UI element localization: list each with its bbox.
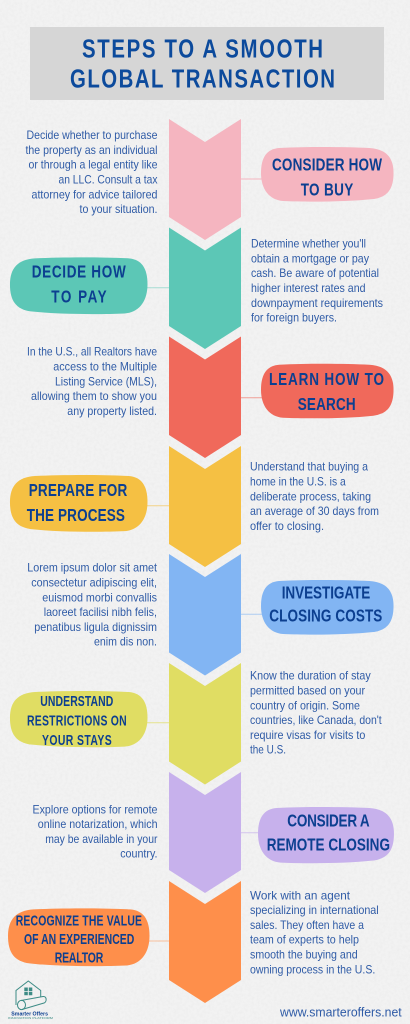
label blob: step 8: OF AN EXPERIENCED bbox=[24, 931, 134, 947]
label blob: step 1: TO BUY bbox=[301, 181, 354, 200]
description: step 7: online notarization, which bbox=[38, 818, 157, 831]
description: step 1: attorney for advice tailored bbox=[32, 188, 158, 201]
description: step 8: sales. They often have a bbox=[250, 919, 364, 932]
step 5: investigate closing costs bbox=[27, 554, 394, 676]
description: step 6 bbox=[250, 670, 382, 757]
website url: www.smarteroffers.net bbox=[279, 1006, 402, 1020]
description: step 4 bbox=[250, 461, 379, 533]
description: step 2 bbox=[251, 238, 383, 325]
connector: step 6 bbox=[147, 722, 169, 724]
label blob: step 3: LEARN HOW TO bbox=[269, 370, 384, 390]
description: step 7 bbox=[32, 803, 158, 861]
step 1: consider how to buy bbox=[26, 119, 394, 240]
chevron: step 7 bbox=[169, 772, 241, 893]
label blob: step 1 bbox=[261, 147, 394, 202]
icon: house with scroll bbox=[16, 981, 46, 1010]
chevron: step 6 bbox=[169, 663, 241, 784]
description: step 6: Know the duration of stay bbox=[250, 670, 371, 683]
description: step 3: any property listed. bbox=[67, 405, 157, 418]
description: step 6: the U.S. bbox=[250, 744, 286, 757]
description: step 1: the property as an individual bbox=[26, 144, 158, 157]
connector: step 3 bbox=[241, 397, 262, 399]
title banner bbox=[30, 27, 384, 100]
description: step 2: Determine whether you'll bbox=[251, 238, 366, 251]
connector: step 4 bbox=[147, 505, 169, 507]
label blob: step 7 bbox=[258, 807, 394, 863]
label blob: step 3: SEARCH bbox=[298, 395, 356, 415]
label blob: step 2: TO PAY bbox=[51, 288, 107, 307]
description: step 6: country of origin. Some bbox=[250, 699, 360, 712]
label blob: step 5: CLOSING COSTS bbox=[269, 607, 382, 626]
connector: step 5 bbox=[241, 613, 262, 615]
label blob: step 4: PREPARE FOR bbox=[29, 481, 128, 501]
label blob: step 1: CONSIDER HOW bbox=[272, 156, 382, 175]
description: step 2: downpayment requirements bbox=[251, 297, 383, 310]
description: step 7: Explore options for remote bbox=[32, 803, 158, 816]
description: step 3: access to the Multiple bbox=[53, 360, 157, 374]
description: step 3: allowing them to show you bbox=[31, 390, 157, 403]
description: step 1: an LLC. Consult a tax bbox=[58, 174, 158, 186]
label blob: step 4: THE PROCESS bbox=[27, 506, 125, 526]
label blob: step 7: REMOTE CLOSING bbox=[267, 836, 390, 855]
description: step 8: owning process in the U.S. bbox=[250, 963, 375, 976]
label blob: step 5 bbox=[261, 580, 394, 635]
label blob: step 2 bbox=[10, 257, 147, 314]
label blob: step 8: RECOGNIZE THE VALUE bbox=[16, 913, 142, 929]
description: step 3 bbox=[27, 346, 157, 418]
chevron: step 5 bbox=[169, 554, 241, 676]
description: step 7: may be available in your bbox=[45, 833, 158, 846]
description: step 5: laoreet facilisi nibh felis, bbox=[44, 606, 157, 619]
description: step 4: home in the U.S. is a bbox=[250, 476, 346, 488]
label blob: step 6: RESTRICTIONS ON bbox=[27, 713, 127, 729]
description: step 2: obtain a mortgage or pay bbox=[251, 252, 369, 266]
connector: step 2 bbox=[147, 287, 169, 289]
label blob: step 6: UNDERSTAND bbox=[40, 693, 113, 709]
description: step 2: for foreign buyers. bbox=[251, 312, 337, 325]
label blob: step 6: YOUR STAYS bbox=[42, 732, 112, 748]
step 3: learn how to search bbox=[27, 336, 394, 458]
description: step 6: permitted based on your bbox=[250, 684, 365, 698]
description: step 5 bbox=[27, 562, 158, 649]
step 6: understand restrictions on your stays bbox=[10, 663, 382, 784]
description: step 4: an average of 30 days from bbox=[250, 505, 379, 518]
label blob: step 5: INVESTIGATE bbox=[282, 584, 370, 603]
description: step 7: country. bbox=[120, 848, 158, 861]
label blob: step 8: REALTOR bbox=[55, 950, 103, 966]
description: step 6: require visas for visits to bbox=[250, 729, 365, 742]
description: step 1 bbox=[26, 129, 158, 216]
label blob: step 8 bbox=[8, 908, 149, 966]
chevron: step 8 bbox=[169, 881, 241, 1003]
description: step 4: Understand that buying a bbox=[250, 461, 368, 474]
description: step 5: enim dis non. bbox=[94, 636, 157, 649]
description: step 8: Work with an agent bbox=[250, 889, 351, 902]
chevron: step 4 bbox=[169, 446, 241, 567]
connector: step 1 bbox=[241, 178, 262, 180]
title banner: STEPS TO A SMOOTH bbox=[82, 34, 323, 63]
step 7: consider a remote closing bbox=[32, 772, 394, 893]
description: step 8: team of experts to help bbox=[250, 934, 359, 947]
connector: step 8 bbox=[149, 940, 169, 942]
description: step 3: In the U.S., all Realtors have bbox=[27, 346, 157, 359]
connector: step 7 bbox=[241, 832, 259, 834]
logo: Smarter Offers: INNOVATION PLATFORM bbox=[8, 1017, 53, 1020]
chevron: step 3 bbox=[169, 336, 241, 458]
description: step 8: specializing in international bbox=[250, 904, 379, 917]
label blob: step 3 bbox=[261, 364, 394, 418]
description: step 1: to your situation. bbox=[80, 203, 158, 216]
logo: Smarter Offers: Smarter Offers bbox=[11, 1012, 48, 1018]
description: step 1: or through a legal entity like bbox=[28, 159, 158, 172]
description: step 3: Listing Service (MLS), bbox=[55, 375, 157, 388]
step 2: decide how to pay bbox=[10, 228, 383, 349]
description: step 2: higher interest rates and bbox=[251, 282, 366, 295]
chevron: step 2 bbox=[169, 228, 241, 349]
description: step 4: deliberate process, taking bbox=[250, 490, 371, 503]
logo: Smarter Offers bbox=[8, 981, 53, 1020]
step 4: prepare for the process bbox=[10, 446, 379, 567]
description: step 4: offer to closing. bbox=[250, 520, 324, 533]
description: step 2: cash. Be aware of potential bbox=[251, 267, 379, 280]
label blob: step 4 bbox=[10, 475, 147, 532]
description: step 8: smooth the buying and bbox=[250, 948, 358, 962]
description: step 8 bbox=[250, 889, 379, 976]
description: step 6: countries, like Canada, don't bbox=[250, 714, 382, 727]
description: step 1: Decide whether to purchase bbox=[26, 129, 158, 142]
title banner: GLOBAL TRANSACTION bbox=[70, 64, 335, 93]
description: step 5: euismod morbi convallis bbox=[42, 591, 157, 604]
step 8: recognize the value of an experienced realtor bbox=[8, 881, 379, 1003]
label blob: step 7: CONSIDER A bbox=[287, 812, 370, 831]
description: step 5: Lorem ipsum dolor sit amet bbox=[27, 562, 158, 575]
label blob: step 6 bbox=[10, 691, 147, 748]
description: step 5: penatibus ligula dignissim bbox=[34, 621, 157, 634]
description: step 5: consectetur adipiscing elit, bbox=[31, 576, 157, 590]
label blob: step 2: DECIDE HOW bbox=[32, 263, 126, 282]
chevron: step 1 bbox=[169, 119, 241, 240]
